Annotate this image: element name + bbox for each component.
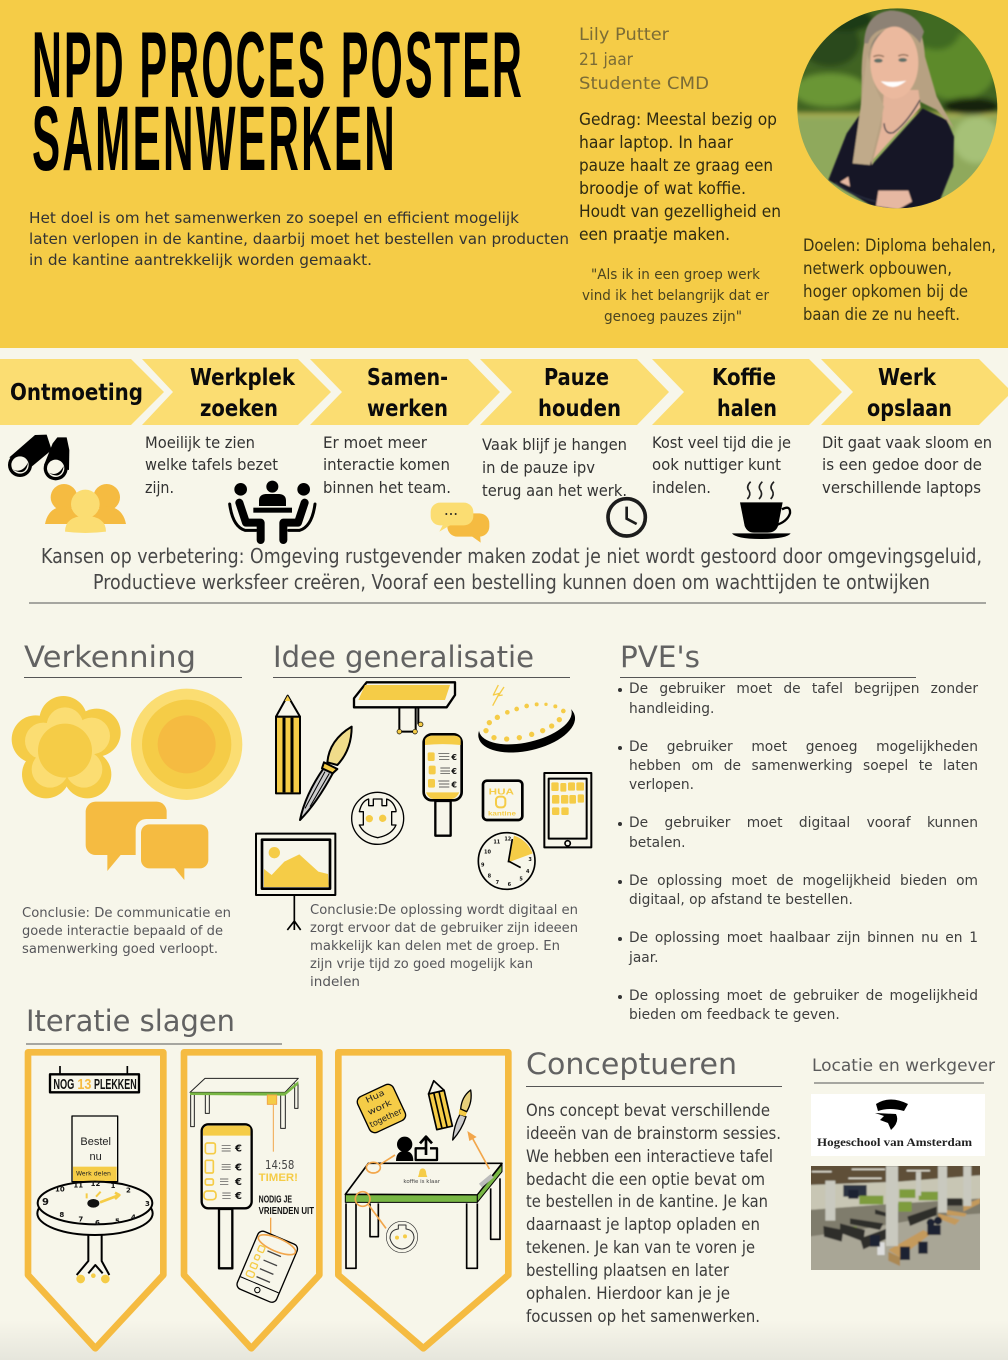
round table with clock: 2 bbox=[126, 1186, 131, 1194]
icon: menu paddle: € bbox=[450, 753, 457, 762]
concept text bbox=[526, 1101, 781, 1326]
intro text: in de kantine aantrekkelijk worden gemaakt. bbox=[29, 251, 372, 269]
persona behaviour: een praatje maken. bbox=[579, 225, 730, 245]
PVE requirements list: De gebruiker moet de tafel begrijpen zonder bbox=[629, 681, 978, 697]
sticker: Hua work together bbox=[355, 1082, 408, 1135]
PVE requirements list: jaar. bbox=[629, 950, 659, 966]
round table with clock: 7 bbox=[78, 1216, 83, 1224]
top bbox=[828, 108, 954, 213]
persona name block: 21 jaar bbox=[579, 50, 633, 69]
step notes: Kost veel tijd die je bbox=[652, 433, 791, 452]
hair strand front bbox=[853, 53, 884, 165]
chevron: Werk opslaan: Werk bbox=[878, 363, 937, 391]
heading: Iteratie slagen: Iteratie slagen bbox=[26, 1004, 235, 1038]
chevron: Koffie halen: halen bbox=[717, 394, 777, 422]
table with green edge: koffie is klaar bbox=[403, 1179, 441, 1185]
sign: places left: PLEKKEN bbox=[94, 1077, 137, 1093]
sticker: Hua work together: together bbox=[368, 1105, 404, 1129]
chevron: Pauze houden: Pauze bbox=[544, 363, 609, 391]
heading: Idee generalisatie bbox=[273, 640, 534, 674]
conclusion text: makkelijk kan delen met de groep. En bbox=[310, 939, 560, 954]
chevron: Samenwerken bbox=[310, 359, 500, 425]
icon: brush bbox=[300, 727, 352, 820]
concept text: tekenen. Je kan van te voren je bbox=[526, 1238, 755, 1257]
step notes bbox=[145, 433, 992, 500]
icon: HUA sign: HUA bbox=[489, 786, 514, 796]
step notes: zijn. bbox=[145, 478, 174, 497]
conclusion text: Conclusie: De communicatie en bbox=[22, 906, 231, 921]
card: Bestel nu: nu bbox=[90, 1151, 102, 1163]
logo: Hogeschool van Amsterdam: Hogeschool van Amsterdam bbox=[817, 1135, 972, 1149]
PVE requirements list: handleiding. bbox=[629, 701, 714, 717]
PVE requirements list bbox=[618, 681, 978, 1023]
icon: clock sketch: 4 bbox=[526, 869, 530, 875]
round table with clock: 9 bbox=[42, 1197, 49, 1208]
icon: sun bbox=[131, 689, 242, 800]
persona name block: Lily Putter bbox=[579, 25, 669, 44]
chevron: Werk opslaan bbox=[821, 359, 1008, 425]
concept text: focussen op het samenwerken. bbox=[526, 1307, 760, 1326]
timer text: TIMER! bbox=[259, 1172, 298, 1184]
conclusion text: zorgt ervoor dat de gebruiker zijn ideeen bbox=[310, 921, 578, 936]
PVE requirements list: hebben om de samenwerking soepel te laten bbox=[629, 758, 978, 774]
panel: Idee generalisatie bbox=[256, 640, 591, 990]
round table with clock: 1 bbox=[111, 1182, 116, 1190]
banner 2: table with menu and phone bbox=[184, 1052, 319, 1348]
chevron: Werkplek zoeken: Werkplek bbox=[190, 363, 296, 391]
persona behaviour: pauze haalt ze graag een bbox=[579, 156, 773, 176]
icons: flower, sun and speech bubbles bbox=[12, 689, 242, 880]
icon: clock sketch: 7 bbox=[496, 880, 500, 886]
conclusion text: zijn vrije tijd zo goed mogelijk kan bbox=[310, 957, 533, 972]
concept text: te bestellen in de kantine. Je kan bbox=[526, 1192, 768, 1211]
persona quote: genoeg pauzes zijn" bbox=[604, 309, 742, 325]
icon: coffee cup bbox=[732, 482, 791, 539]
persona goals: netwerk opbouwen, bbox=[803, 259, 952, 278]
timer text bbox=[259, 1158, 314, 1235]
sticker: Hua work together: Hua bbox=[364, 1087, 386, 1105]
step notes: Er moet meer bbox=[323, 433, 427, 452]
panel: Locatie en werkgever bbox=[808, 1056, 995, 1273]
icon: meeting table bbox=[230, 481, 315, 540]
icon: tablet bbox=[544, 773, 591, 847]
chevron: Pauze houden: houden bbox=[538, 394, 621, 422]
conclusion text: goede interactie bepaald of de bbox=[22, 924, 223, 939]
icon: clock sketch: 5 bbox=[519, 877, 523, 883]
face bbox=[870, 27, 918, 99]
icon: pencil bbox=[276, 696, 300, 793]
sign: places left: 13 bbox=[77, 1077, 91, 1093]
heading: PVE's: PVE's bbox=[620, 640, 700, 674]
persona goals bbox=[803, 236, 996, 324]
sticker: Hua work together: work bbox=[366, 1097, 393, 1117]
PVE requirements list: verlopen. bbox=[629, 777, 694, 793]
timer text: VRIENDEN UIT bbox=[259, 1206, 314, 1217]
menu paddle: € bbox=[234, 1144, 242, 1155]
conclusion text bbox=[310, 903, 578, 990]
icon: clock bbox=[608, 499, 645, 536]
step notes: indelen. bbox=[652, 478, 711, 497]
persona name block bbox=[579, 25, 709, 93]
concept text: bedacht die een optie bevat om bbox=[526, 1170, 765, 1189]
sign: places left: NOG bbox=[53, 1077, 74, 1093]
menu paddle: € bbox=[234, 1177, 242, 1188]
timer text: NODIG JE bbox=[259, 1194, 292, 1205]
intro text: laten verlopen in de kantine, daarbij moet het bestellen van producten bbox=[29, 230, 569, 248]
step notes: ook nuttiger kunt bbox=[652, 455, 781, 474]
sign: places left bbox=[50, 1066, 139, 1093]
orange callouts bbox=[355, 1131, 489, 1228]
icon: clock sketch: 6 bbox=[508, 882, 512, 888]
round table with clock: 4 bbox=[131, 1214, 136, 1222]
hair behind bbox=[852, 11, 954, 166]
banner 1: round table bbox=[28, 1052, 163, 1348]
icon: painting on easel bbox=[256, 834, 335, 930]
round table with clock: 6 bbox=[95, 1219, 100, 1227]
menu paddle bbox=[202, 1124, 252, 1268]
round table with clock: 3 bbox=[145, 1200, 150, 1208]
PVE requirements list: De oplossing moet haalbaar zijn binnen nu en 1 bbox=[629, 930, 978, 946]
chevron: Samenwerken: Samen- bbox=[367, 363, 448, 391]
round table with clock bbox=[37, 1180, 153, 1283]
person and share icons bbox=[396, 1137, 437, 1161]
chevron: Werkplek zoeken bbox=[142, 359, 331, 425]
heading: Verkenning bbox=[24, 640, 196, 674]
conclusion text: Conclusie:De oplossing wordt digitaal en bbox=[310, 903, 578, 918]
title bbox=[32, 12, 524, 190]
chevron: Ontmoeting bbox=[0, 359, 164, 425]
chevron: Ontmoeting: Ontmoeting bbox=[10, 378, 143, 406]
icon: clock sketch: 3 bbox=[528, 857, 532, 863]
necklace bbox=[884, 100, 920, 133]
PVE requirements list: De oplossing moet de gebruiker de mogelijkheid bbox=[629, 988, 978, 1004]
header panel bbox=[0, 0, 1008, 348]
neck and chest bbox=[873, 90, 921, 159]
PVE requirements list: De gebruiker moet digitaal vooraf kunnen bbox=[629, 815, 978, 831]
chevron: Werk opslaan: opslaan bbox=[867, 394, 952, 422]
persona behaviour bbox=[579, 110, 781, 245]
icon: flower bbox=[12, 696, 121, 798]
card: Bestel nu: Bestel bbox=[80, 1136, 111, 1148]
table with green edge bbox=[345, 1163, 502, 1268]
table bbox=[190, 1078, 298, 1152]
step notes: Moeilijk te zien bbox=[145, 433, 255, 452]
icon: HUA sign: kantine bbox=[488, 811, 517, 818]
icon: clock sketch: 8 bbox=[488, 873, 492, 879]
step notes: is een gedoe door de bbox=[822, 455, 982, 474]
heading: Locatie en werkgever bbox=[812, 1056, 995, 1075]
icon: clock sketch bbox=[478, 833, 535, 889]
icon: menu paddle: € bbox=[450, 767, 457, 776]
round table with clock: 5 bbox=[115, 1217, 120, 1225]
step notes: welke tafels bezet bbox=[145, 455, 278, 474]
concept text: ophalen. Hierdoor kan je je bbox=[526, 1284, 730, 1303]
icon: HUA sign bbox=[483, 781, 522, 820]
step notes: interactie komen bbox=[323, 455, 450, 474]
icon: menu paddle bbox=[424, 734, 462, 836]
PVE requirements list: De oplossing moet de mogelijkheid bieden om bbox=[629, 873, 978, 889]
PVE requirements list: digitaal, op afstand te bestellen. bbox=[629, 892, 853, 908]
icon: clock sketch: 11 bbox=[493, 840, 501, 846]
icon: speech bubbles bbox=[86, 802, 214, 880]
chevron: Koffie halen bbox=[652, 359, 842, 425]
PVE requirements list: De gebruiker moet genoeg mogelijkheden bbox=[629, 739, 978, 755]
persona goals: baan die ze nu heeft. bbox=[803, 305, 960, 324]
conclusion text: samenwerking goed verloopt. bbox=[22, 942, 218, 957]
portrait photo bbox=[793, 3, 1003, 215]
icon: binoculars bbox=[8, 435, 69, 480]
round table with clock: 12 bbox=[91, 1180, 101, 1188]
arm crease bbox=[835, 183, 877, 202]
concept text: We hebben een interactieve tafel bbox=[526, 1147, 773, 1166]
photo: canteen bbox=[808, 1163, 983, 1273]
icon: chat bubbles bbox=[431, 503, 489, 543]
icon: clock sketch: 10 bbox=[484, 849, 491, 855]
round table with clock: 8 bbox=[59, 1211, 64, 1219]
chevron: Pauze houden bbox=[480, 359, 669, 425]
persona quote: "Als ik in een groep werk bbox=[591, 267, 761, 283]
heading: Conceptueren bbox=[526, 1047, 737, 1081]
icon: group of people bbox=[45, 484, 126, 533]
menu paddle: € bbox=[234, 1162, 242, 1173]
concept text: bestelling plaatsen en later bbox=[526, 1261, 729, 1280]
chevron: Werkplek zoeken: zoeken bbox=[200, 394, 278, 422]
concept text: Ons concept bevat verschillende bbox=[526, 1101, 770, 1120]
panel: Conceptueren bbox=[526, 1047, 782, 1326]
chevron: Samenwerken: werken bbox=[367, 394, 448, 422]
process chevrons bbox=[0, 359, 1008, 425]
icon: clock sketch: 12 bbox=[504, 836, 512, 842]
page fade at the bottom bbox=[0, 1320, 1008, 1360]
conclusion text bbox=[22, 906, 231, 957]
round table with clock: 11 bbox=[73, 1182, 83, 1190]
chevron: Koffie halen: Koffie bbox=[712, 363, 776, 391]
phone bbox=[235, 1230, 299, 1304]
persona name block: Studente CMD bbox=[579, 74, 709, 93]
icon: table bbox=[354, 682, 455, 734]
opportunities text bbox=[41, 544, 982, 594]
hands bbox=[876, 191, 912, 209]
step notes: Vaak blijf je hangen bbox=[482, 435, 627, 454]
step notes: verschillende laptops bbox=[822, 478, 981, 497]
logo: Hogeschool van Amsterdam bbox=[811, 1094, 985, 1156]
persona behaviour: haar laptop. In haar bbox=[579, 133, 733, 153]
banner 3: final table concept bbox=[338, 1052, 508, 1348]
persona behaviour: broodje of wat koffie. bbox=[579, 179, 746, 199]
conclusion text: indelen bbox=[310, 975, 360, 990]
concept text: ideeën van de brainstorm sessies. bbox=[526, 1124, 781, 1143]
persona behaviour: Houdt van gezelligheid en bbox=[579, 202, 781, 222]
intro text bbox=[29, 209, 569, 269]
card: Bestel nu: Werk delen bbox=[76, 1171, 111, 1178]
persona behaviour: Gedrag: Meestal bezig op bbox=[579, 110, 777, 130]
panel: Verkenning bbox=[12, 640, 242, 957]
intro text: Het doel is om het samenwerken zo soepel en efficient mogelijk bbox=[29, 209, 519, 227]
menu paddle: € bbox=[234, 1191, 242, 1202]
socket bbox=[386, 1221, 418, 1253]
persona quote bbox=[582, 267, 769, 325]
icon: round table bbox=[473, 685, 580, 761]
icon: menu paddle: € bbox=[450, 781, 457, 790]
sketches bbox=[256, 682, 591, 930]
PVE requirements list: betalen. bbox=[629, 835, 686, 851]
persona quote: vind ik het belangrijk dat er bbox=[582, 288, 769, 304]
PVE requirements list: bieden om feedback te geven. bbox=[629, 1007, 840, 1023]
concept text: daarnaast je laptop opladen en bbox=[526, 1215, 760, 1234]
title: SAMENWERKEN bbox=[32, 88, 397, 190]
pencil and brush bbox=[426, 1079, 452, 1130]
step notes: binnen het team. bbox=[323, 478, 451, 497]
icon: socket bbox=[352, 792, 404, 844]
banners: iteration sketches 1 and 2 bbox=[28, 1052, 319, 1348]
step notes: Dit gaat vaak sloom en bbox=[822, 433, 992, 452]
round table with clock: 10 bbox=[55, 1186, 65, 1194]
timer text: 14:58 bbox=[265, 1158, 294, 1172]
card: Bestel nu bbox=[72, 1116, 118, 1182]
persona goals: hoger opkomen bij de bbox=[803, 282, 968, 301]
icon: clock sketch: 9 bbox=[481, 863, 485, 869]
step notes: in de pauze ipv bbox=[482, 458, 595, 477]
step notes: terug aan het werk. bbox=[482, 481, 627, 500]
